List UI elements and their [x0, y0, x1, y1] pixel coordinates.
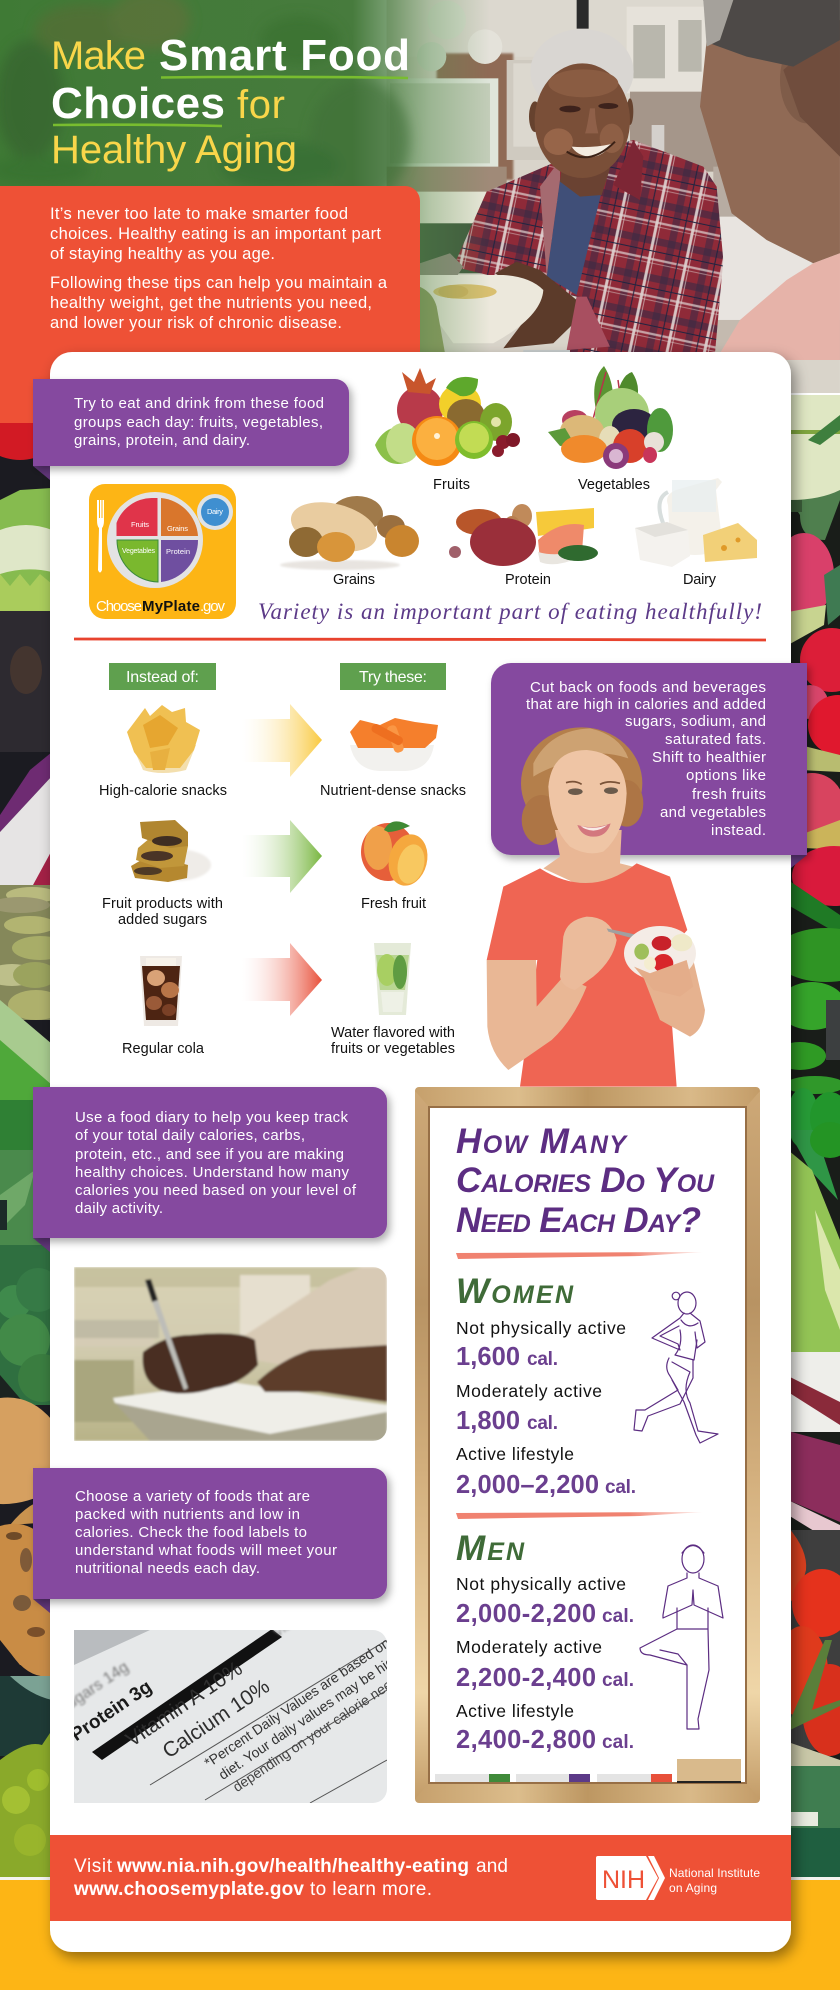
photo: writing in a notebook [74, 1267, 387, 1441]
section: men: 2,200-2,400 [456, 1664, 596, 1692]
panel: cut back callout: instead. [711, 822, 766, 839]
panel: food labels callout: Choose a variety of foods that are [75, 1488, 310, 1505]
photo: woman eating fruit salad [487, 727, 705, 1087]
panel: food labels callout [33, 1468, 387, 1613]
icon: MyPlate logo: Fruits [131, 520, 149, 529]
icon: MyPlate logo: MyPlate [142, 598, 200, 615]
white rule above bottom band [0, 1877, 840, 1880]
icon: peach [361, 821, 433, 890]
label: fruits: Fruits [433, 477, 470, 493]
section: men: Men [456, 1529, 525, 1568]
icon: protein [449, 504, 598, 566]
label: regular cola: Regular cola [122, 1041, 205, 1057]
panel: food diary callout: daily activity. [75, 1200, 163, 1217]
title: Smart Food [159, 31, 410, 80]
title: Healthy Aging [51, 128, 297, 172]
footer band [50, 1835, 791, 1921]
panel: cut back callout: fresh fruits [692, 786, 766, 803]
footer band: and [476, 1856, 508, 1877]
red brush divider [74, 639, 766, 640]
NIH logo: National Institute [669, 1866, 760, 1880]
label: high-calorie snacks: High-calorie snacks [99, 783, 227, 799]
heading: instead of [109, 663, 216, 690]
tagline: variety: Variety is an important part of eating healthfully! [258, 599, 762, 624]
panel: food diary callout: healthy choices. Understand how many [75, 1164, 350, 1181]
panel: food diary callout: calories you need based on your level of [75, 1182, 357, 1199]
section: women: 1,600 [456, 1343, 520, 1371]
section: women: 2,000–2,200 [456, 1471, 599, 1499]
label: fruit products with added sugars [102, 896, 223, 928]
panel: food labels callout: packed with nutrients and low in [75, 1506, 300, 1523]
section: women: Not physically active [456, 1318, 626, 1338]
heading: how many calories [456, 1122, 715, 1240]
photo: nutrition facts label: Sugars 14g [55, 1659, 132, 1718]
label: water flavored: fruits or vegetables [331, 1041, 455, 1057]
heading: instead of: Instead of: [126, 669, 199, 686]
icon: fig bars [131, 820, 211, 882]
panel: food groups callout: Try to eat and drink from these food [74, 395, 324, 412]
header green overlay [0, 0, 490, 352]
label: water flavored: Water flavored with [331, 1025, 455, 1041]
section: men [456, 1529, 634, 1754]
icon: cola glass [140, 956, 182, 1026]
section: women: Active lifestyle [456, 1444, 574, 1464]
section: men: cal. [602, 1732, 634, 1753]
whiteboard: calorie needs [415, 1087, 760, 1803]
icon: carrots in bowl [350, 718, 438, 771]
footer band: www.choosemyplate.gov [73, 1879, 304, 1900]
panel: intro: healthy weight, get the nutrients you need, [50, 294, 372, 312]
heading: try these [340, 663, 446, 690]
icon: MyPlate logo: Grains [167, 524, 188, 533]
label: water flavored [331, 1025, 455, 1057]
photo: nutrition facts label: Protein 3g [67, 1676, 156, 1746]
section: men: 2,400-2,800 [456, 1726, 596, 1754]
header leaf texture [0, 0, 410, 200]
section: men: Moderately active [456, 1637, 602, 1657]
panel: cut back callout: sugars, sodium, and [625, 713, 766, 730]
right vegetable strip [791, 395, 840, 1877]
panel: food labels callout: understand what foods will meet your [75, 1542, 337, 1559]
icon: grains [280, 494, 419, 570]
title: for [237, 83, 285, 127]
label: nutrient-dense snacks: Nutrient-dense snacks [320, 783, 466, 799]
panel: cut back callout: and vegetables [660, 804, 766, 821]
icon: MyPlate logo: .gov [200, 598, 226, 615]
panel: intro: of staying healthy as you age. [50, 245, 275, 263]
section: women: 1,800 [456, 1407, 520, 1435]
section: men: cal. [602, 1606, 634, 1627]
icon: MyPlate logo [89, 484, 236, 619]
label: dairy: Dairy [683, 572, 717, 588]
salmon brush rule [456, 1252, 703, 1259]
label: protein: Protein [505, 572, 551, 588]
photo: nutrition facts label: Vitamin A 10% [122, 1657, 247, 1752]
white rule on right strip [788, 393, 840, 395]
section: men: cal. [602, 1670, 634, 1691]
panel: intro: It’s never too late to make smarter food [50, 205, 348, 223]
section: men: Active lifestyle [456, 1701, 574, 1721]
icon: MyPlate logo: Vegetables [122, 548, 156, 555]
heading: how many calories: Calories Do You [456, 1161, 715, 1200]
arrow: green [242, 820, 322, 893]
title: Make [51, 34, 146, 78]
arrow: red [242, 943, 322, 1016]
icon: vegetables [548, 366, 673, 469]
photo: nutrition facts label: *Percent Daily Values are based on a [201, 1628, 402, 1771]
panel: intro [0, 186, 420, 423]
NIH logo [596, 1856, 760, 1900]
panel: food diary callout [33, 1087, 387, 1252]
left vegetable strip [0, 423, 50, 1877]
panel: cut back callout: Cut back on foods and beverages [530, 679, 766, 696]
panel: cut back callout: saturated fats. [665, 731, 766, 748]
NIH logo: NIH [602, 1866, 645, 1894]
photo: nutrition facts label [74, 1630, 387, 1803]
NIH logo: on Aging [669, 1881, 717, 1895]
label: vegetables: Vegetables [578, 477, 650, 493]
footer band: Visit [74, 1856, 113, 1877]
panel: food diary callout: of your total daily calories, carbs, [75, 1127, 305, 1144]
panel: intro: Following these tips can help you maintain a [50, 274, 388, 292]
photo: nutrition facts label: Calcium 10% [159, 1675, 274, 1763]
whiteboard tray: markers and eraser [435, 1759, 741, 1783]
label: fresh fruit: Fresh fruit [361, 896, 426, 912]
heading: try these: Try these: [359, 669, 427, 686]
panel: food groups callout [33, 379, 349, 480]
panel: food diary callout: Use a food diary to help you keep track [75, 1109, 348, 1126]
icon: water with lime [374, 943, 411, 1015]
panel: food groups callout: groups each day: fruits, vegetables, [74, 414, 323, 431]
title: Choices [51, 79, 225, 128]
panel: cut back callout: that are high in calories and added [526, 696, 766, 713]
panel: intro: and lower your risk of chronic disease. [50, 314, 342, 332]
photo: nutrition facts label: Vitamin C · Iron 6% [270, 1564, 372, 1640]
heading: how many calories: How Many [456, 1122, 628, 1161]
title [51, 31, 410, 172]
label: fruit products with added sugars: added sugars [118, 912, 207, 928]
panel: food groups callout: grains, protein, and dairy. [74, 432, 250, 449]
icon: dairy [635, 478, 757, 567]
photo: nutrition facts label: depending on your calorie needs [230, 1668, 407, 1795]
section: women: Moderately active [456, 1381, 602, 1401]
bottom yellow band [0, 1880, 840, 1990]
panel: food labels callout: calories. Check the food labels to [75, 1524, 307, 1541]
salmon brush rule [456, 1512, 703, 1519]
icon: MyPlate logo: Choose [96, 598, 142, 615]
icon: MyPlate logo: Dairy [207, 507, 223, 516]
label: grains: Grains [333, 572, 375, 588]
icon: running woman [634, 1292, 718, 1443]
icon: yoga man [640, 1545, 723, 1729]
photo: nutrition facts label: diet. Your daily values may be higher [216, 1642, 414, 1783]
footer band: www.nia.nih.gov/health/healthy-eating [116, 1856, 469, 1877]
icon: chips in bowl [127, 705, 200, 773]
section: women: cal. [527, 1413, 558, 1434]
panel: food diary callout: protein, etc., and see if you are making [75, 1146, 344, 1163]
panel: cut back callout: Shift to healthier [652, 749, 766, 766]
panel: cut back callout: options like [686, 767, 766, 784]
heading: how many calories: Need Each Day? [456, 1201, 701, 1240]
arrow: yellow [242, 704, 322, 777]
section: women: cal. [527, 1349, 558, 1370]
label: fruit products with added sugars: Fruit products with [102, 896, 223, 912]
section: men: Not physically active [456, 1574, 626, 1594]
icon: MyPlate logo: Protein [166, 547, 190, 556]
panel: intro: choices. Healthy eating is an important part [50, 225, 381, 243]
panel: food labels callout: nutritional needs each day. [75, 1560, 260, 1577]
footer band: to learn more. [310, 1879, 432, 1900]
main white card [50, 352, 791, 1952]
icon: fruits [375, 368, 520, 466]
section: women [456, 1272, 636, 1499]
panel: cut back callout [491, 663, 807, 868]
section: women: Women [456, 1272, 574, 1311]
header photo: man handing a bowl across a kitchen table [387, 0, 840, 393]
section: men: 2,000-2,200 [456, 1600, 596, 1628]
section: women: cal. [605, 1477, 636, 1498]
